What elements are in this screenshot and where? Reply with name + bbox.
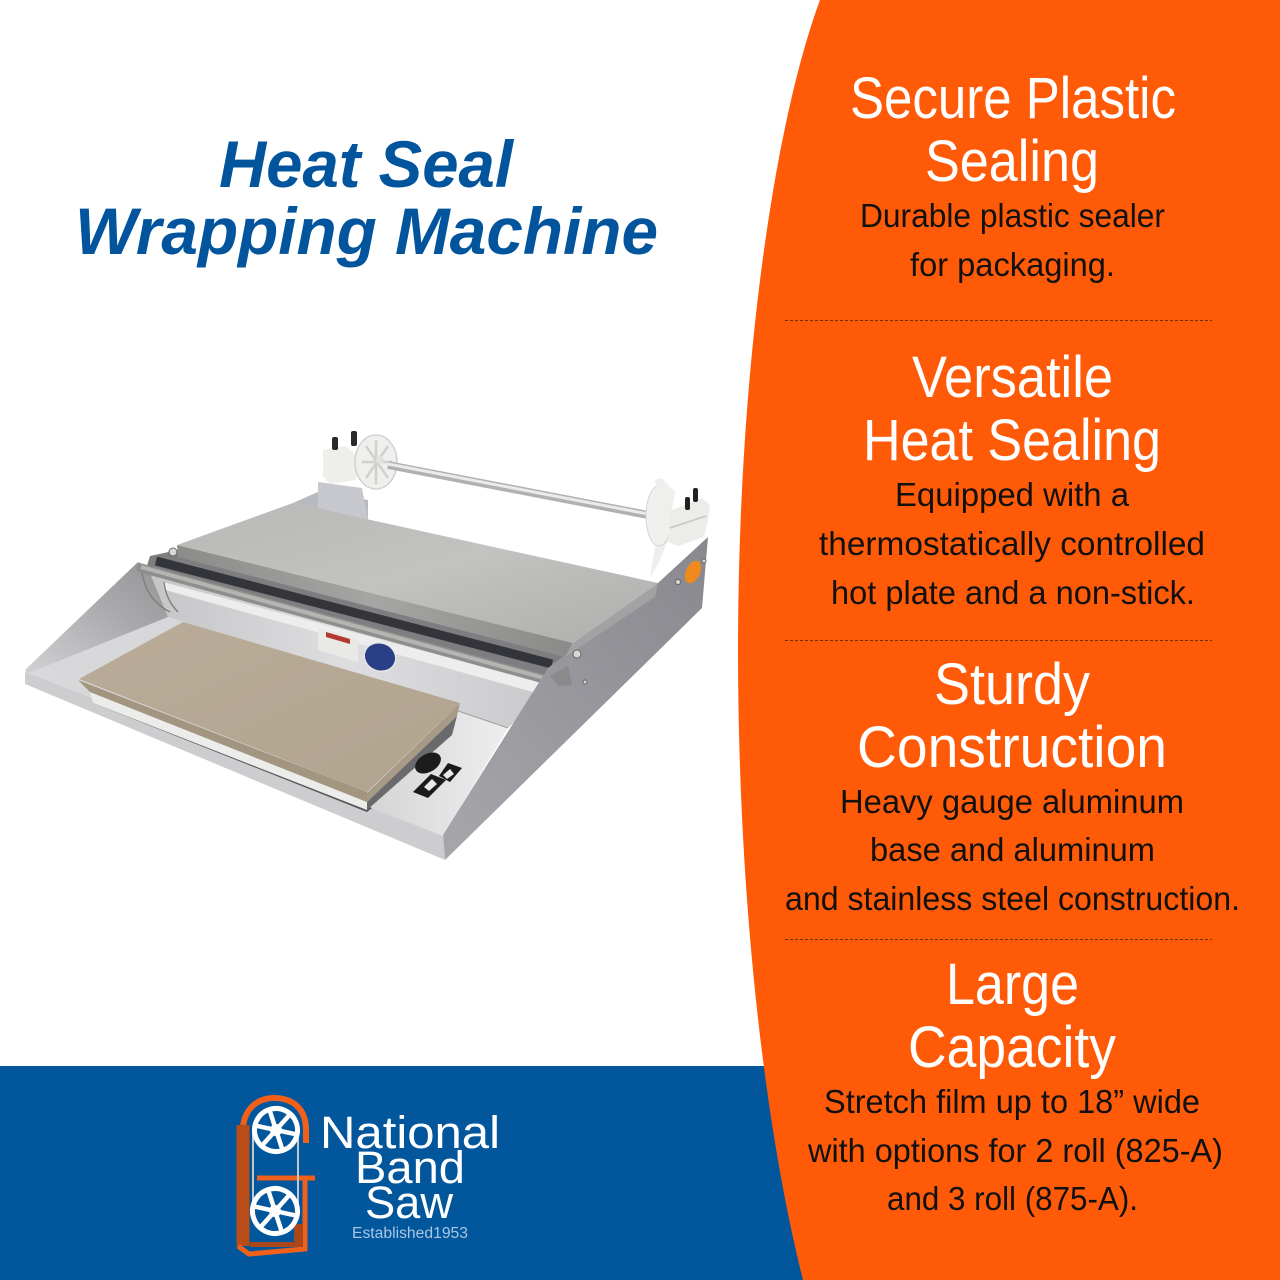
- title: Wrapping Machine: [75, 194, 658, 268]
- heating pad side face: [367, 703, 460, 802]
- blue footer band: [0, 1066, 900, 1280]
- tray floor: [27, 617, 508, 836]
- top plate: [177, 503, 658, 643]
- logo wordmark: Established1953: [352, 1225, 468, 1242]
- black sealing channel: [156, 561, 552, 664]
- right roll bracket: [646, 478, 710, 578]
- tray left wall: [25, 562, 168, 674]
- description: and stainless steel construction.: [785, 880, 1240, 917]
- orange warning sticker: [682, 558, 704, 586]
- description: thermostatically controlled: [819, 525, 1205, 562]
- heating pad top: [79, 622, 460, 792]
- roller rod: [388, 464, 648, 515]
- logo wordmark: Band: [355, 1142, 465, 1193]
- heading: Versatile: [912, 345, 1113, 410]
- left roll bracket: [293, 431, 397, 522]
- tray floor fold line: [382, 685, 508, 728]
- back wall rail: [163, 582, 555, 694]
- description: [807, 1083, 1223, 1217]
- heading: Heat Sealing: [863, 408, 1161, 473]
- pad control knob: [411, 748, 445, 778]
- description: [860, 197, 1165, 283]
- roller end cap: [550, 666, 572, 686]
- heading: [857, 652, 1167, 780]
- logo wordmark: Saw: [365, 1177, 453, 1228]
- plate front edge: [177, 545, 573, 657]
- description: Stretch film up to 18” wide: [824, 1083, 1200, 1120]
- description: [819, 476, 1205, 611]
- heading: [863, 345, 1161, 473]
- rating label: [318, 627, 358, 662]
- temperature control stickers: [413, 763, 462, 798]
- product photo: heat seal wrapping machine: [25, 431, 710, 860]
- heating pad front face: [78, 680, 367, 802]
- description: hot plate and a non-stick.: [831, 574, 1195, 611]
- pad shadow: [93, 698, 372, 812]
- heading: Sealing: [925, 129, 1099, 194]
- heading: [850, 66, 1176, 194]
- pad right side frame: [367, 716, 457, 810]
- title: Heat Seal: [219, 127, 515, 201]
- description: base and aluminum: [870, 831, 1155, 868]
- upper wheel: [249, 1103, 303, 1157]
- heading: Sturdy: [934, 652, 1090, 717]
- feature: sturdy construction: [785, 652, 1240, 917]
- description: Durable plastic sealer: [860, 197, 1165, 234]
- pad metal base: [90, 692, 367, 810]
- logo mark: band saw: [238, 1098, 315, 1254]
- orange feature panel: [738, 0, 1280, 1280]
- description: and 3 roll (875-A).: [887, 1180, 1138, 1217]
- front roller tube: [141, 567, 562, 684]
- logo wordmark: National: [320, 1107, 500, 1158]
- end bolts: [169, 548, 706, 684]
- description: [785, 783, 1240, 917]
- side wall top strip: [565, 583, 658, 657]
- heading: Secure Plastic: [850, 66, 1176, 131]
- title: [75, 127, 658, 268]
- heading: [908, 952, 1116, 1080]
- right side wall: [443, 537, 708, 860]
- feature: secure plastic sealing: [850, 66, 1176, 283]
- tray front lip: [25, 672, 445, 860]
- heading: Construction: [857, 715, 1167, 780]
- logo: National Band Saw: [238, 1098, 500, 1254]
- feature: versatile heat sealing: [819, 345, 1205, 611]
- heading: Capacity: [908, 1015, 1116, 1080]
- description: Equipped with a: [895, 476, 1130, 513]
- cable wires: [142, 572, 178, 612]
- lower wheel: [247, 1183, 303, 1239]
- description: Heavy gauge aluminum: [840, 783, 1184, 820]
- feature: large capacity: [807, 952, 1223, 1217]
- tray back wall: [140, 566, 558, 728]
- logo wordmark: [320, 1107, 500, 1242]
- description: for packaging.: [910, 246, 1115, 283]
- gap behind roller: [145, 550, 567, 684]
- badge: [360, 638, 400, 676]
- description: with options for 2 roll (825-A): [807, 1132, 1223, 1169]
- heading: Large: [946, 952, 1079, 1017]
